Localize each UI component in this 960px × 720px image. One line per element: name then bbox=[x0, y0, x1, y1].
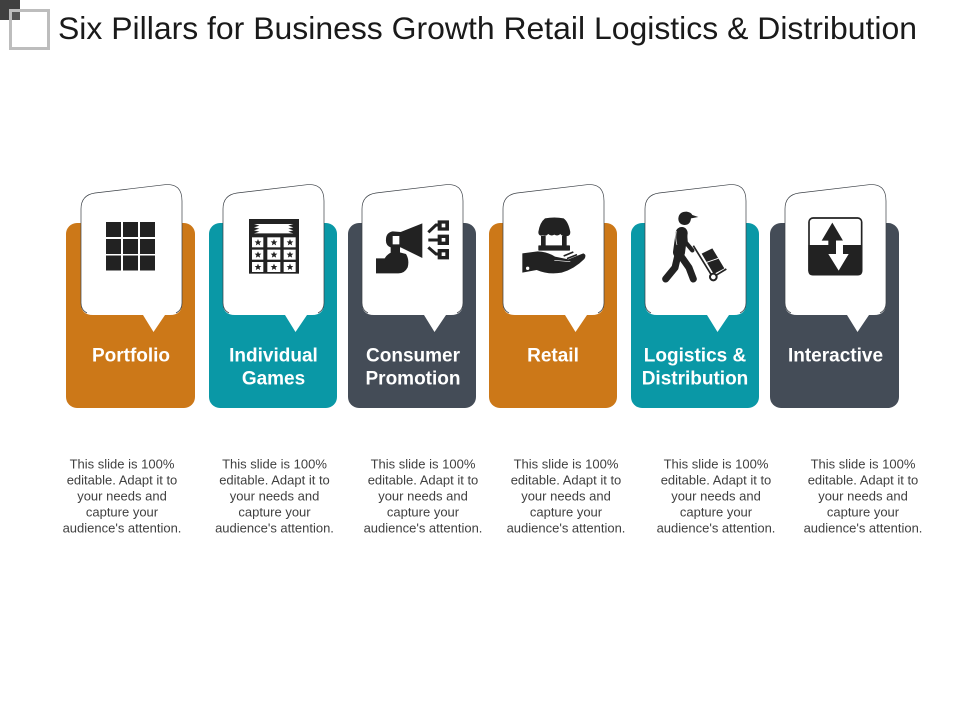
icon: up and down arrows bbox=[808, 218, 862, 275]
callout: Portfolio bubble bbox=[81, 185, 182, 332]
text block: Retail description: your needs and bbox=[521, 488, 611, 504]
icon: delivery worker with hand truck bbox=[666, 212, 726, 280]
text block: Logistics description: This slide is 100% bbox=[664, 456, 769, 472]
icon: megaphone and network bbox=[376, 220, 449, 273]
text block: Retail description: editable. Adapt it to bbox=[511, 472, 621, 488]
text block: Individual Games description: editable. Adapt it to bbox=[219, 472, 330, 488]
text block: Consumer Promotion description: capture your bbox=[387, 504, 460, 520]
text block: Logistics description: your needs and bbox=[671, 488, 761, 504]
label: Portfolio: Portfolio bbox=[92, 346, 170, 366]
panel: Logistics & Distribution bbox=[631, 185, 759, 408]
panel: Retail bbox=[489, 185, 617, 408]
icon: game card bbox=[249, 219, 299, 274]
callout: Individual Games bubble bbox=[223, 185, 324, 332]
panel: Individual Games bbox=[209, 185, 337, 408]
text block: Individual Games description: your needs and bbox=[230, 488, 319, 504]
text block: Interactive description: This slide is 100% bbox=[811, 456, 916, 472]
callout: Retail bubble bbox=[503, 185, 604, 332]
label: Individual Games: Games bbox=[242, 368, 305, 390]
label: Logistics & Distribution: Logistics & bbox=[644, 346, 746, 366]
text block: Retail description: capture your bbox=[530, 504, 603, 520]
text block: Consumer Promotion description: This slide is 100% bbox=[371, 456, 476, 472]
text block: Portfolio description: editable. Adapt it to bbox=[67, 472, 177, 488]
label: Individual Games: Individual bbox=[229, 346, 318, 366]
text block: Interactive description: capture your bbox=[827, 504, 900, 520]
text block: Interactive description: editable. Adapt it to bbox=[808, 472, 918, 488]
text block: Retail description: This slide is 100% bbox=[514, 456, 619, 472]
icon: shop on open hand bbox=[522, 217, 585, 273]
text block: Portfolio description: capture your bbox=[86, 504, 159, 520]
callout: Interactive bubble bbox=[785, 185, 886, 332]
text block: Individual Games description: This slide is 100% bbox=[222, 456, 327, 472]
text block: Individual Games description: capture your bbox=[238, 504, 311, 520]
panel: Interactive bbox=[770, 185, 899, 408]
text block: Consumer Promotion description: your needs and bbox=[378, 488, 468, 504]
label: Interactive: Interactive bbox=[788, 346, 883, 366]
panel: Consumer Promotion bbox=[348, 185, 476, 408]
text block: Consumer Promotion description: audience's attention. bbox=[364, 520, 482, 536]
label: Logistics & Distribution: Distribution bbox=[642, 368, 748, 390]
logo mark: corner squares bbox=[0, 0, 48, 48]
label: Retail: Retail bbox=[527, 346, 579, 366]
text block: Logistics description: audience's attention. bbox=[657, 520, 775, 536]
text block: Consumer Promotion description: editable. Adapt it to bbox=[368, 472, 478, 488]
callout: Consumer Promotion bubble bbox=[362, 185, 463, 332]
label: Consumer Promotion: Promotion bbox=[366, 368, 460, 390]
callout: Logistics bubble bbox=[645, 185, 746, 332]
panel: Portfolio bbox=[66, 185, 195, 408]
text block: Portfolio description: This slide is 100% bbox=[70, 456, 175, 472]
text block: Interactive description: your needs and bbox=[818, 488, 908, 504]
title: Six Pillars for Business Growth Retail Logistics & Distribution bbox=[58, 10, 917, 46]
text block: Individual Games description: audience's attention. bbox=[215, 520, 334, 536]
icon: grid bbox=[106, 222, 155, 270]
text block: Portfolio description: audience's attention. bbox=[63, 520, 181, 536]
text block: Retail description: audience's attention. bbox=[507, 520, 625, 536]
text block: Logistics description: editable. Adapt it to bbox=[661, 472, 771, 488]
label: Consumer Promotion: Consumer bbox=[366, 346, 460, 366]
text block: Logistics description: capture your bbox=[680, 504, 753, 520]
text block: Portfolio description: your needs and bbox=[77, 488, 167, 504]
text block: Interactive description: audience's attention. bbox=[804, 520, 922, 536]
